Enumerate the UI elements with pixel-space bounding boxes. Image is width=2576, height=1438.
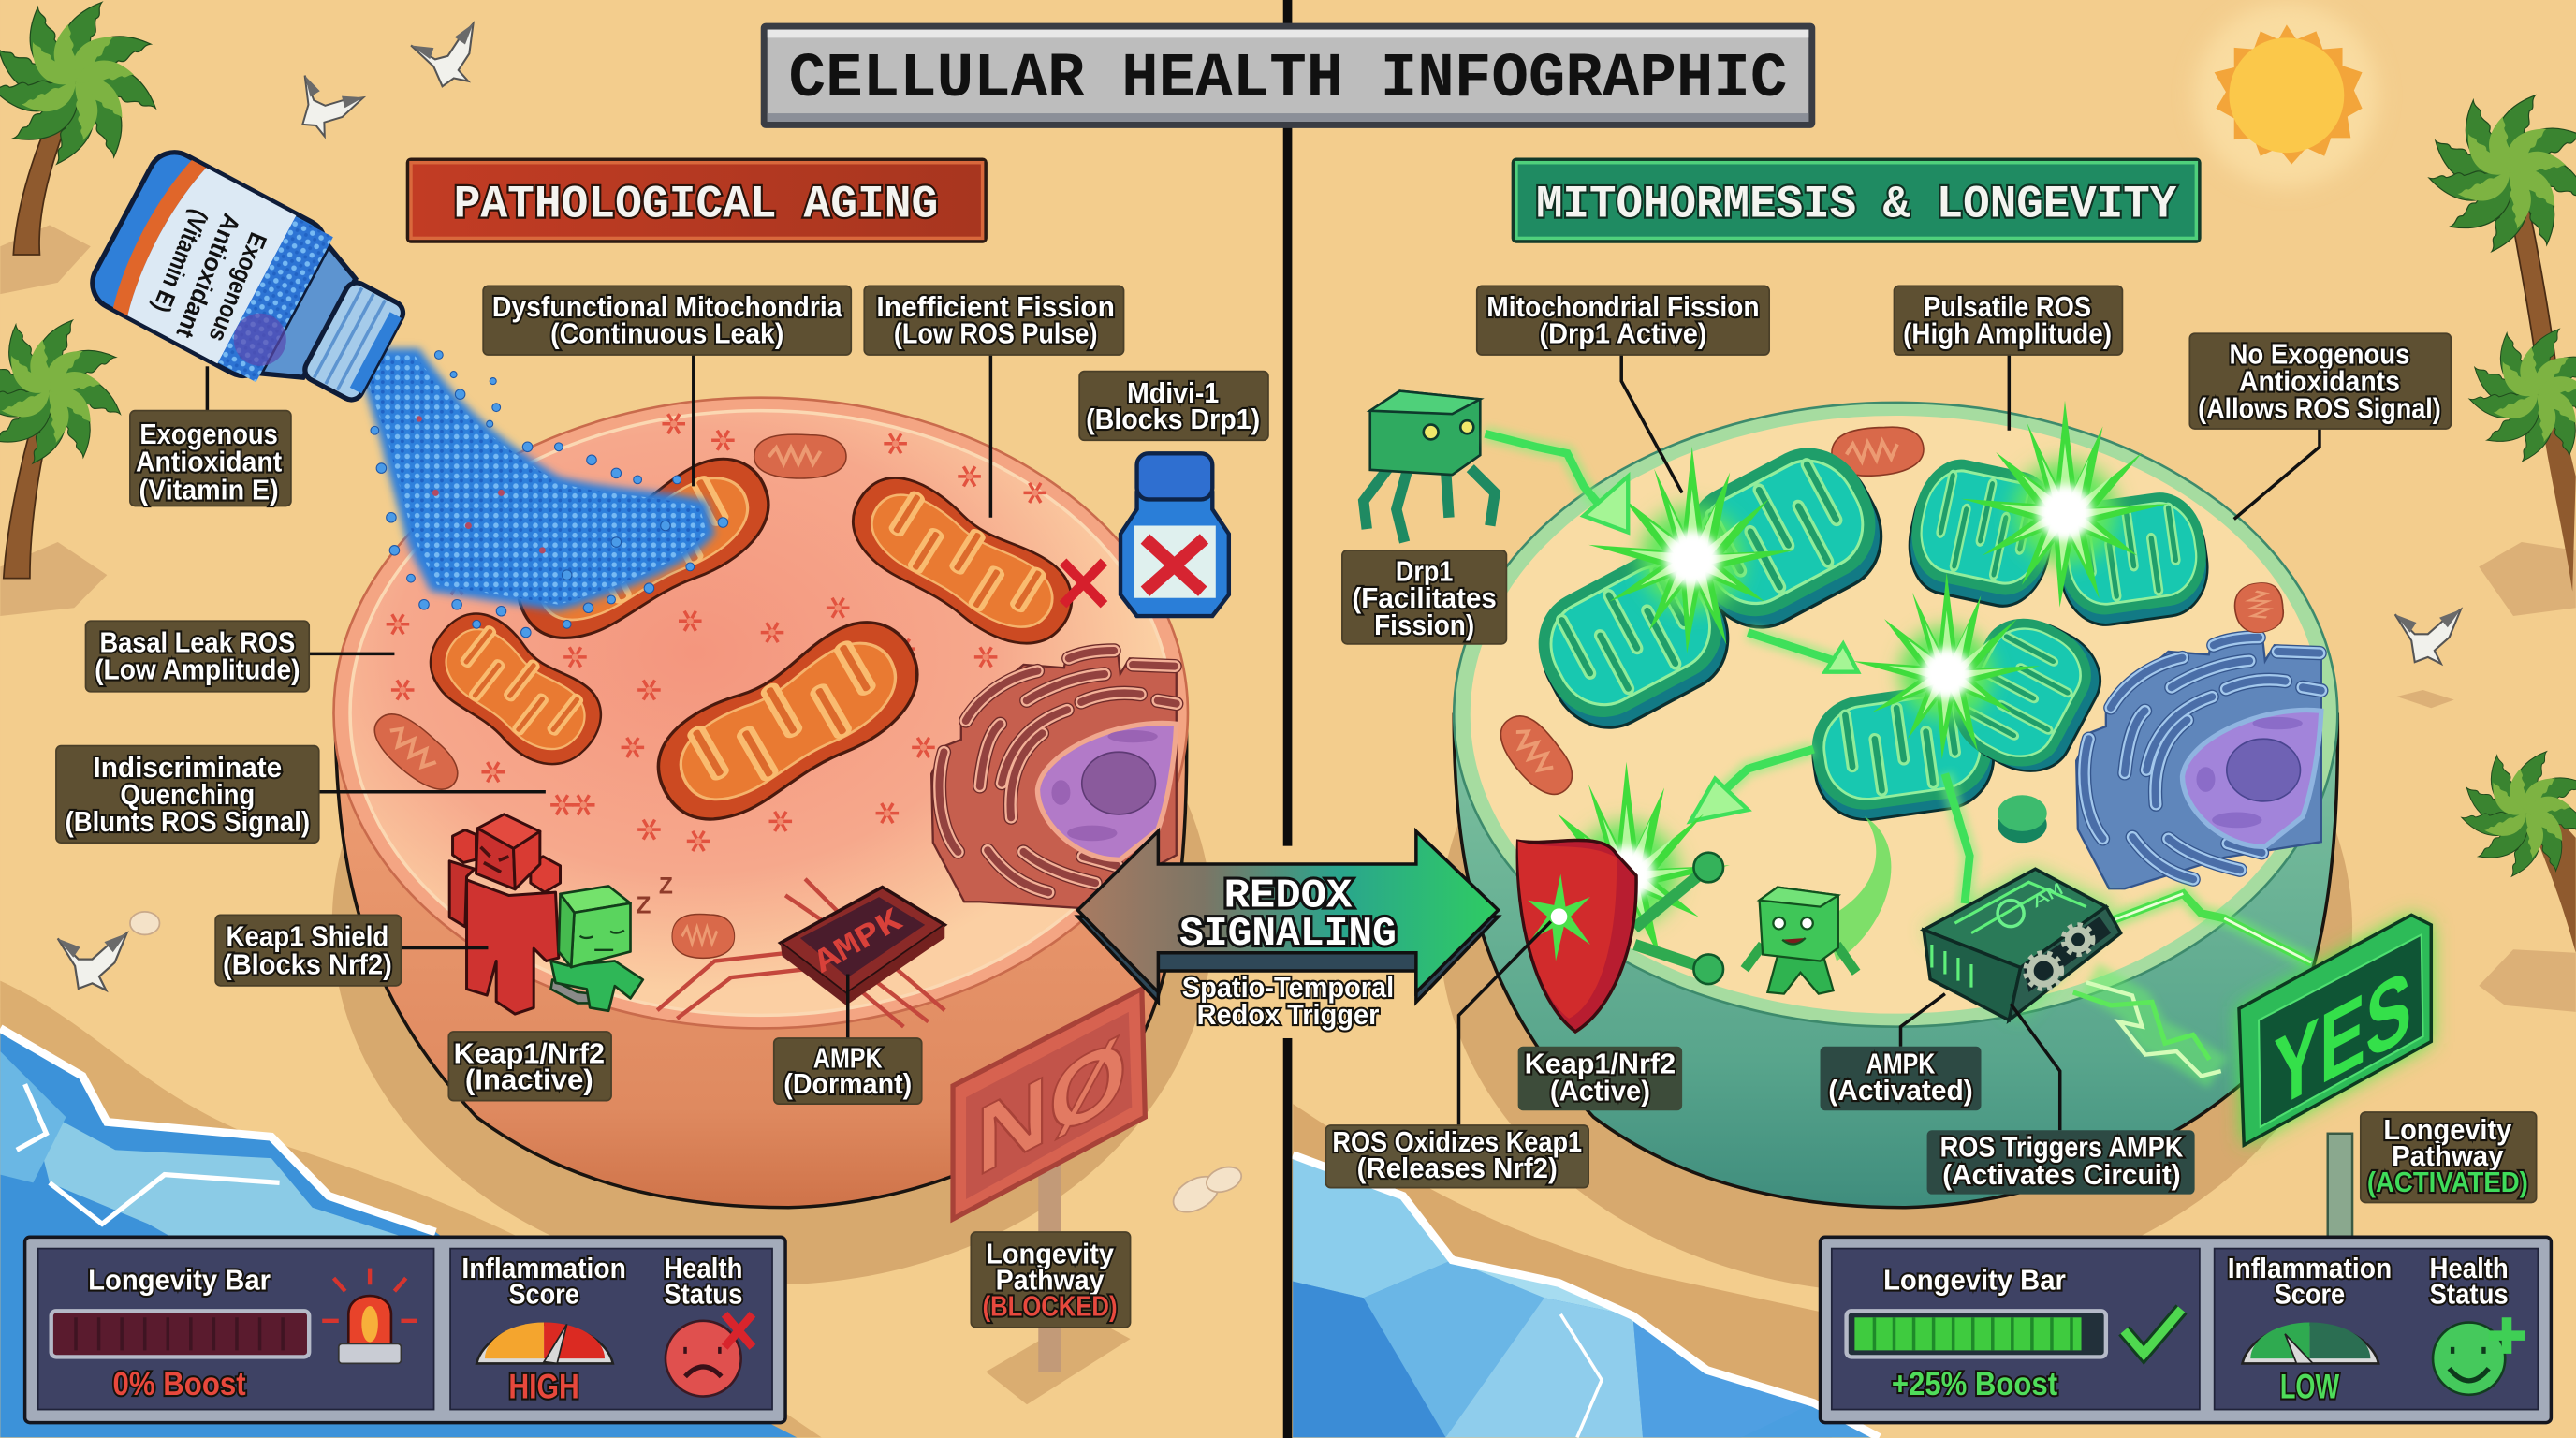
label: no exogenous antioxidants [2189,333,2451,429]
seashells [130,912,1245,1220]
arrow: redox signaling [1077,831,1499,1002]
label: longevity pathway blocked [971,1232,1131,1328]
mitochondrion lower-left [413,596,616,784]
text: spatio-temporal redox trigger: Spatio-Temporal [1182,971,1394,1004]
label: Mdivi-1 [1079,372,1268,440]
endoplasmic reticulum right [2076,633,2321,888]
label: inefficient fission: (Low ROS Pulse) [894,317,1097,350]
label: ROS triggers AMPK [1927,1130,2195,1195]
longevity bar empty [51,1311,309,1357]
label: Keap1/Nrf2 active [1518,1047,1682,1110]
arrow: redox signaling: SIGNALING [1179,911,1397,958]
label: Keap1/Nrf2 inactive: (Inactive) [465,1063,593,1095]
label: no exogenous antioxidants: No Exogenous [2229,338,2409,371]
label: indiscriminate quenching: Indiscriminate [93,751,282,784]
icon: antioxidant bottle [83,143,421,432]
label: AMPK dormant [774,1038,922,1104]
leader lines [207,355,2320,1130]
inflammation score heading: Score [2275,1277,2345,1310]
label: pulsatile ROS [1894,286,2122,355]
panel: left status [25,1237,785,1423]
label: dysfunctional mitochondria [483,286,851,355]
label: inefficient fission [864,286,1124,355]
boost value: 0% Boost [112,1366,246,1402]
right beach shore [1293,1104,1880,1437]
health status heading: Status [2430,1277,2509,1310]
icon: Keap1 shield active [1517,762,1730,1032]
label: Keap1 shield: (Blocks Nrf2) [223,948,392,981]
bottle label text: Exogenous [203,228,272,346]
fissioning mitochondrion 2 [1899,401,2214,630]
small green cylinder [1998,795,2047,843]
mitochondrion small 1 [754,434,846,478]
icon: Mdivi-1 bottle [1120,453,1229,616]
small mitochondrion left [1489,706,1583,805]
icon: sleep zzz: Z [659,874,673,900]
icon: red golem Keap1 inactive shield [449,814,561,1014]
label: exogenous antioxidant [130,411,291,506]
icon: AMPK active circuit box [1924,867,2121,1020]
icon: YES sign [2239,915,2431,1240]
label: AMPK dormant: (Dormant) [783,1067,912,1100]
label: ROS oxidizes Keap1: ROS Oxidizes Keap1 [1332,1125,1582,1158]
label: Keap1/Nrf2 inactive: Keap1/Nrf2 [454,1036,605,1069]
antioxidant spray [354,348,728,638]
label: Drp1 [1342,550,1506,644]
text: spatio-temporal redox trigger: Redox Trigger [1197,998,1379,1031]
label: Drp1: Fission) [1374,609,1474,641]
label: longevity pathway blocked: Pathway [996,1263,1104,1296]
icon: sleep zzz [636,874,673,919]
label: Keap1 shield: Keap1 Shield [227,920,388,953]
icon: NO sign [953,989,1145,1404]
arrow: redox signaling: REDOX [1224,873,1353,920]
label: Keap1/Nrf2 inactive [448,1032,611,1101]
health status heading: Health [664,1252,742,1284]
gauge value: LOW [2280,1367,2339,1405]
title [761,23,1815,128]
icon: sleep zzz: Z [636,891,651,919]
sun [2195,4,2378,187]
label: exogenous antioxidant: Antioxidant [136,446,282,478]
bottle label text: Antioxidant [170,210,246,343]
longevity bar heading: Longevity Bar [1883,1263,2066,1296]
label: indiscriminate quenching: (Blunts ROS Signal) [66,805,310,838]
lightning arrows [1486,433,1969,903]
label: Keap1/Nrf2 active: (Active) [1550,1075,1650,1108]
panel: pathological cell [332,398,1212,1284]
cell disc left [334,398,1188,1028]
inflammation score heading [461,1252,626,1310]
label: ROS triggers AMPK: ROS Triggers AMPK [1940,1130,2183,1163]
bottle label text [147,206,272,346]
label: longevity pathway activated [2361,1112,2537,1202]
palm trees right [2396,87,2576,1012]
icon: AMPK dormant chip [657,879,944,1027]
nucleus left [1037,723,1177,859]
heading: mitohormesis and longevity: MITOHORMESIS & LONGEVITY [1536,179,2177,231]
label: exogenous antioxidant: (Vitamin E) [139,473,279,506]
label: basal leak ROS [86,621,309,692]
label: inefficient fission: Inefficient Fission [876,290,1115,323]
label: mitochondrial fission [1477,286,1769,355]
icon: YES sign: YES [2274,946,2411,1130]
label: longevity pathway activated: Longevity [2383,1113,2511,1146]
gauge: high [476,1323,613,1363]
label: AMPK activated: (Activated) [1828,1074,1973,1107]
label: mitochondrial fission: Mitochondrial Fission [1486,290,1760,323]
icon: sad face [666,1314,753,1397]
leak ROS particles [387,414,1046,851]
nucleus right [2182,710,2321,846]
label: Keap1/Nrf2 active: Keap1/Nrf2 [1525,1048,1676,1080]
label: ROS oxidizes Keap1: (Releases Nrf2) [1357,1152,1558,1184]
seabirds [58,23,2461,990]
health status heading [664,1252,742,1310]
left beach shore [0,981,822,1437]
icon: Drp1 robot [1364,391,1495,542]
label: AMPK activated: AMPK [1866,1048,1935,1080]
gauge value: HIGH [508,1367,579,1405]
icon: active Nrf2 runner [1745,816,1891,994]
palm trees left [0,0,164,616]
icon: happy face [2433,1317,2525,1395]
title: CELLULAR HEALTH INFOGRAPHIC [789,44,1787,115]
label: ROS triggers AMPK: (Activates Circuit) [1942,1158,2181,1191]
label: Drp1: (Facilitates [1352,581,1497,614]
label: longevity pathway activated: Pathway [2392,1139,2503,1172]
label: indiscriminate quenching [56,746,319,843]
fissioning mitochondrion 3 [1806,572,2115,827]
label: dysfunctional mitochondria: Dysfunctional Mitochondria [492,290,842,323]
icon: alarm siren [322,1269,417,1363]
icon: AMPK dormant chip: AMPK [808,902,910,982]
label: basal leak ROS: (Low Amplitude) [95,653,300,686]
label: ROS oxidizes Keap1 [1325,1125,1588,1188]
icon: fission block X [1063,562,1104,605]
longevity bar heading: Longevity Bar [88,1263,271,1296]
health status heading: Health [2430,1252,2509,1284]
heading: pathological aging: PATHOLOGICAL AGING [454,179,938,231]
label: longevity pathway blocked: Longevity [986,1237,1114,1269]
center divider [1283,0,1292,1438]
inflammation score heading: Inflammation [2228,1252,2392,1284]
fissioning mitochondrion 1 [1518,428,1902,747]
health status heading: Status [664,1277,742,1310]
heading: mitohormesis and longevity [1512,157,2202,243]
mitochondrion center [638,603,940,842]
label: AMPK activated [1821,1047,1981,1110]
health status heading [2430,1252,2509,1310]
label: mitochondrial fission: (Drp1 Active) [1539,317,1706,350]
panel: mitohormesis cell [1439,401,2352,1293]
bottle label text: (Vitamin E) [147,206,213,316]
icon: sleeping Nrf2 [551,886,643,1011]
panel: right status [1821,1237,2551,1423]
label: Keap1 shield [215,915,401,986]
cell disc right [1454,403,2337,1027]
icon: AMPK active circuit box: AM [2028,879,2068,913]
endoplasmic reticulum left [931,646,1177,908]
label: pulsatile ROS: Pulsatile ROS [1924,290,2091,323]
label: AMPK dormant: AMPK [813,1042,883,1075]
label: Drp1: Drp1 [1396,554,1453,587]
inflammation score heading: Inflammation [461,1252,626,1284]
longevity bar filled [1847,1311,2106,1357]
label: indiscriminate quenching: Quenching [120,778,255,811]
mitochondrion small 2 [364,704,468,800]
cell wall left [335,712,1187,1208]
small mitochondrion right [2232,580,2287,637]
mitochondrion: inefficient fission [835,459,1088,665]
mitochondrion small 3 [672,914,735,958]
label: longevity pathway activated: (ACTIVATED) [2367,1166,2528,1198]
green signal rays to YES sign [2073,894,2311,1076]
heading: pathological aging [406,157,988,243]
label: exogenous antioxidant: Exogenous [139,418,278,450]
label: pulsatile ROS: (High Amplitude) [1903,317,2112,350]
label: basal leak ROS: Basal Leak ROS [99,626,295,659]
gauge: low [2242,1323,2378,1363]
inflammation score heading: Score [508,1277,579,1310]
boost value: +25% Boost [1892,1366,2057,1402]
mitochondrion: dysfunctional [501,442,788,658]
label: dysfunctional mitochondria: (Continuous Leak) [550,317,783,350]
label: no exogenous antioxidants: (Allows ROS Signal) [2198,392,2441,425]
small mitochondrion top right [1830,423,1925,479]
label: Mdivi-1: (Blocks Drp1) [1086,403,1260,435]
cell wall right [1454,714,2337,1208]
label: longevity pathway blocked: (BLOCKED) [983,1290,1118,1323]
text: spatio-temporal redox trigger [1182,971,1394,1031]
label: Mdivi-1: Mdivi-1 [1127,376,1219,409]
label: no exogenous antioxidants: Antioxidants [2239,365,2400,398]
icon: NO sign: NØ [976,1014,1127,1197]
icon: check mark [2124,1310,2182,1354]
inflammation score heading [2228,1252,2392,1310]
